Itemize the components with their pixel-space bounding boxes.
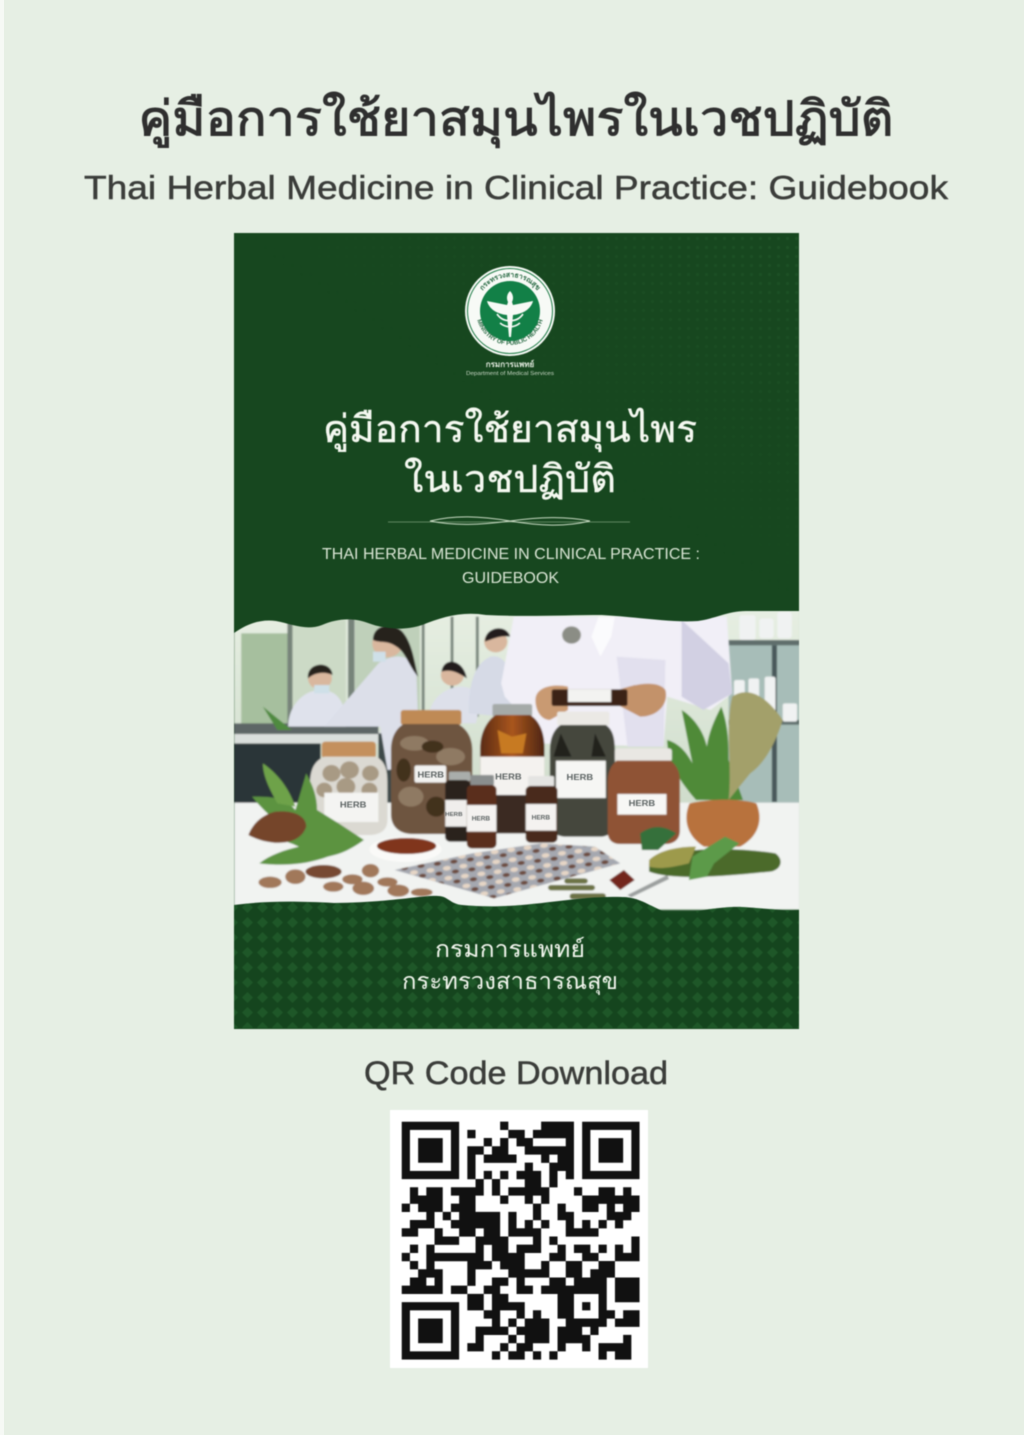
left leaves and root xyxy=(252,773,364,865)
QR code xyxy=(390,1110,648,1368)
round pill jar xyxy=(322,742,376,758)
panel: book cover xyxy=(233,232,800,1030)
plant in pot xyxy=(667,707,743,800)
jar labels: HERB xyxy=(417,770,445,780)
icon: ministry logo xyxy=(464,265,556,377)
table xyxy=(234,803,800,909)
main doctor coat xyxy=(501,617,732,747)
cover background xyxy=(234,233,799,1029)
cover English title xyxy=(322,546,700,587)
icon: ministry logo: กระทรวงสาธารณสุข xyxy=(480,272,540,291)
powder jar xyxy=(615,748,672,762)
cover English title: THAI HERBAL MEDICINE IN CLINICAL PRACTICE : xyxy=(322,546,700,563)
powder dish xyxy=(369,837,442,862)
heading: QR Code Download: QR Code Download xyxy=(364,1055,668,1091)
dark herb jar xyxy=(557,712,609,726)
icon: ministry logo: MINISTRY OF PUBLIC HEALTH xyxy=(476,318,544,346)
subtitle: English heading: Thai Herbal Medicine in Clinical Practice: Guidebook xyxy=(84,169,949,206)
cover title: คู่มือการใช้ยาสมุนไพร xyxy=(323,408,697,452)
cover title: ในเวชปฏิบัติ xyxy=(404,458,616,501)
jar labels xyxy=(340,770,656,823)
jar labels: HERB xyxy=(567,772,594,782)
cover bottom section xyxy=(234,896,799,1028)
large herb jar xyxy=(401,710,461,725)
jar labels: HERB xyxy=(629,798,656,808)
blister pack xyxy=(395,843,620,898)
jar labels: HERB xyxy=(445,812,463,818)
tablets xyxy=(259,864,433,897)
jar labels: HERB xyxy=(495,772,522,781)
background staff xyxy=(288,690,346,727)
small bottles xyxy=(449,772,470,781)
cover bottom section: กระทรวงสาธารณสุข xyxy=(402,968,618,995)
cover English title: GUIDEBOOK xyxy=(462,570,559,587)
cover title xyxy=(323,408,697,501)
jar labels: HERB xyxy=(472,816,491,823)
publisher text: กรมการแพทย์ xyxy=(435,936,585,962)
cucumber and herbs xyxy=(649,849,781,877)
amber bottle xyxy=(492,704,532,717)
photo: doctors and herbal jars xyxy=(234,610,800,910)
capsules and spice xyxy=(548,878,606,899)
back bench xyxy=(234,743,321,803)
jar labels: HERB xyxy=(532,815,551,821)
title: Thai heading: คู่มือการใช้ยาสมุนไพรในเวชปฏิบัติ xyxy=(138,91,894,148)
right shelf xyxy=(729,643,800,803)
torn edge: top xyxy=(234,591,792,633)
icon: ministry logo: Department of Medical Services xyxy=(466,371,555,377)
ornament divider xyxy=(388,517,630,525)
jar labels: HERB xyxy=(340,800,367,809)
icon: ministry logo: กรมการแพทย์ xyxy=(486,359,535,369)
